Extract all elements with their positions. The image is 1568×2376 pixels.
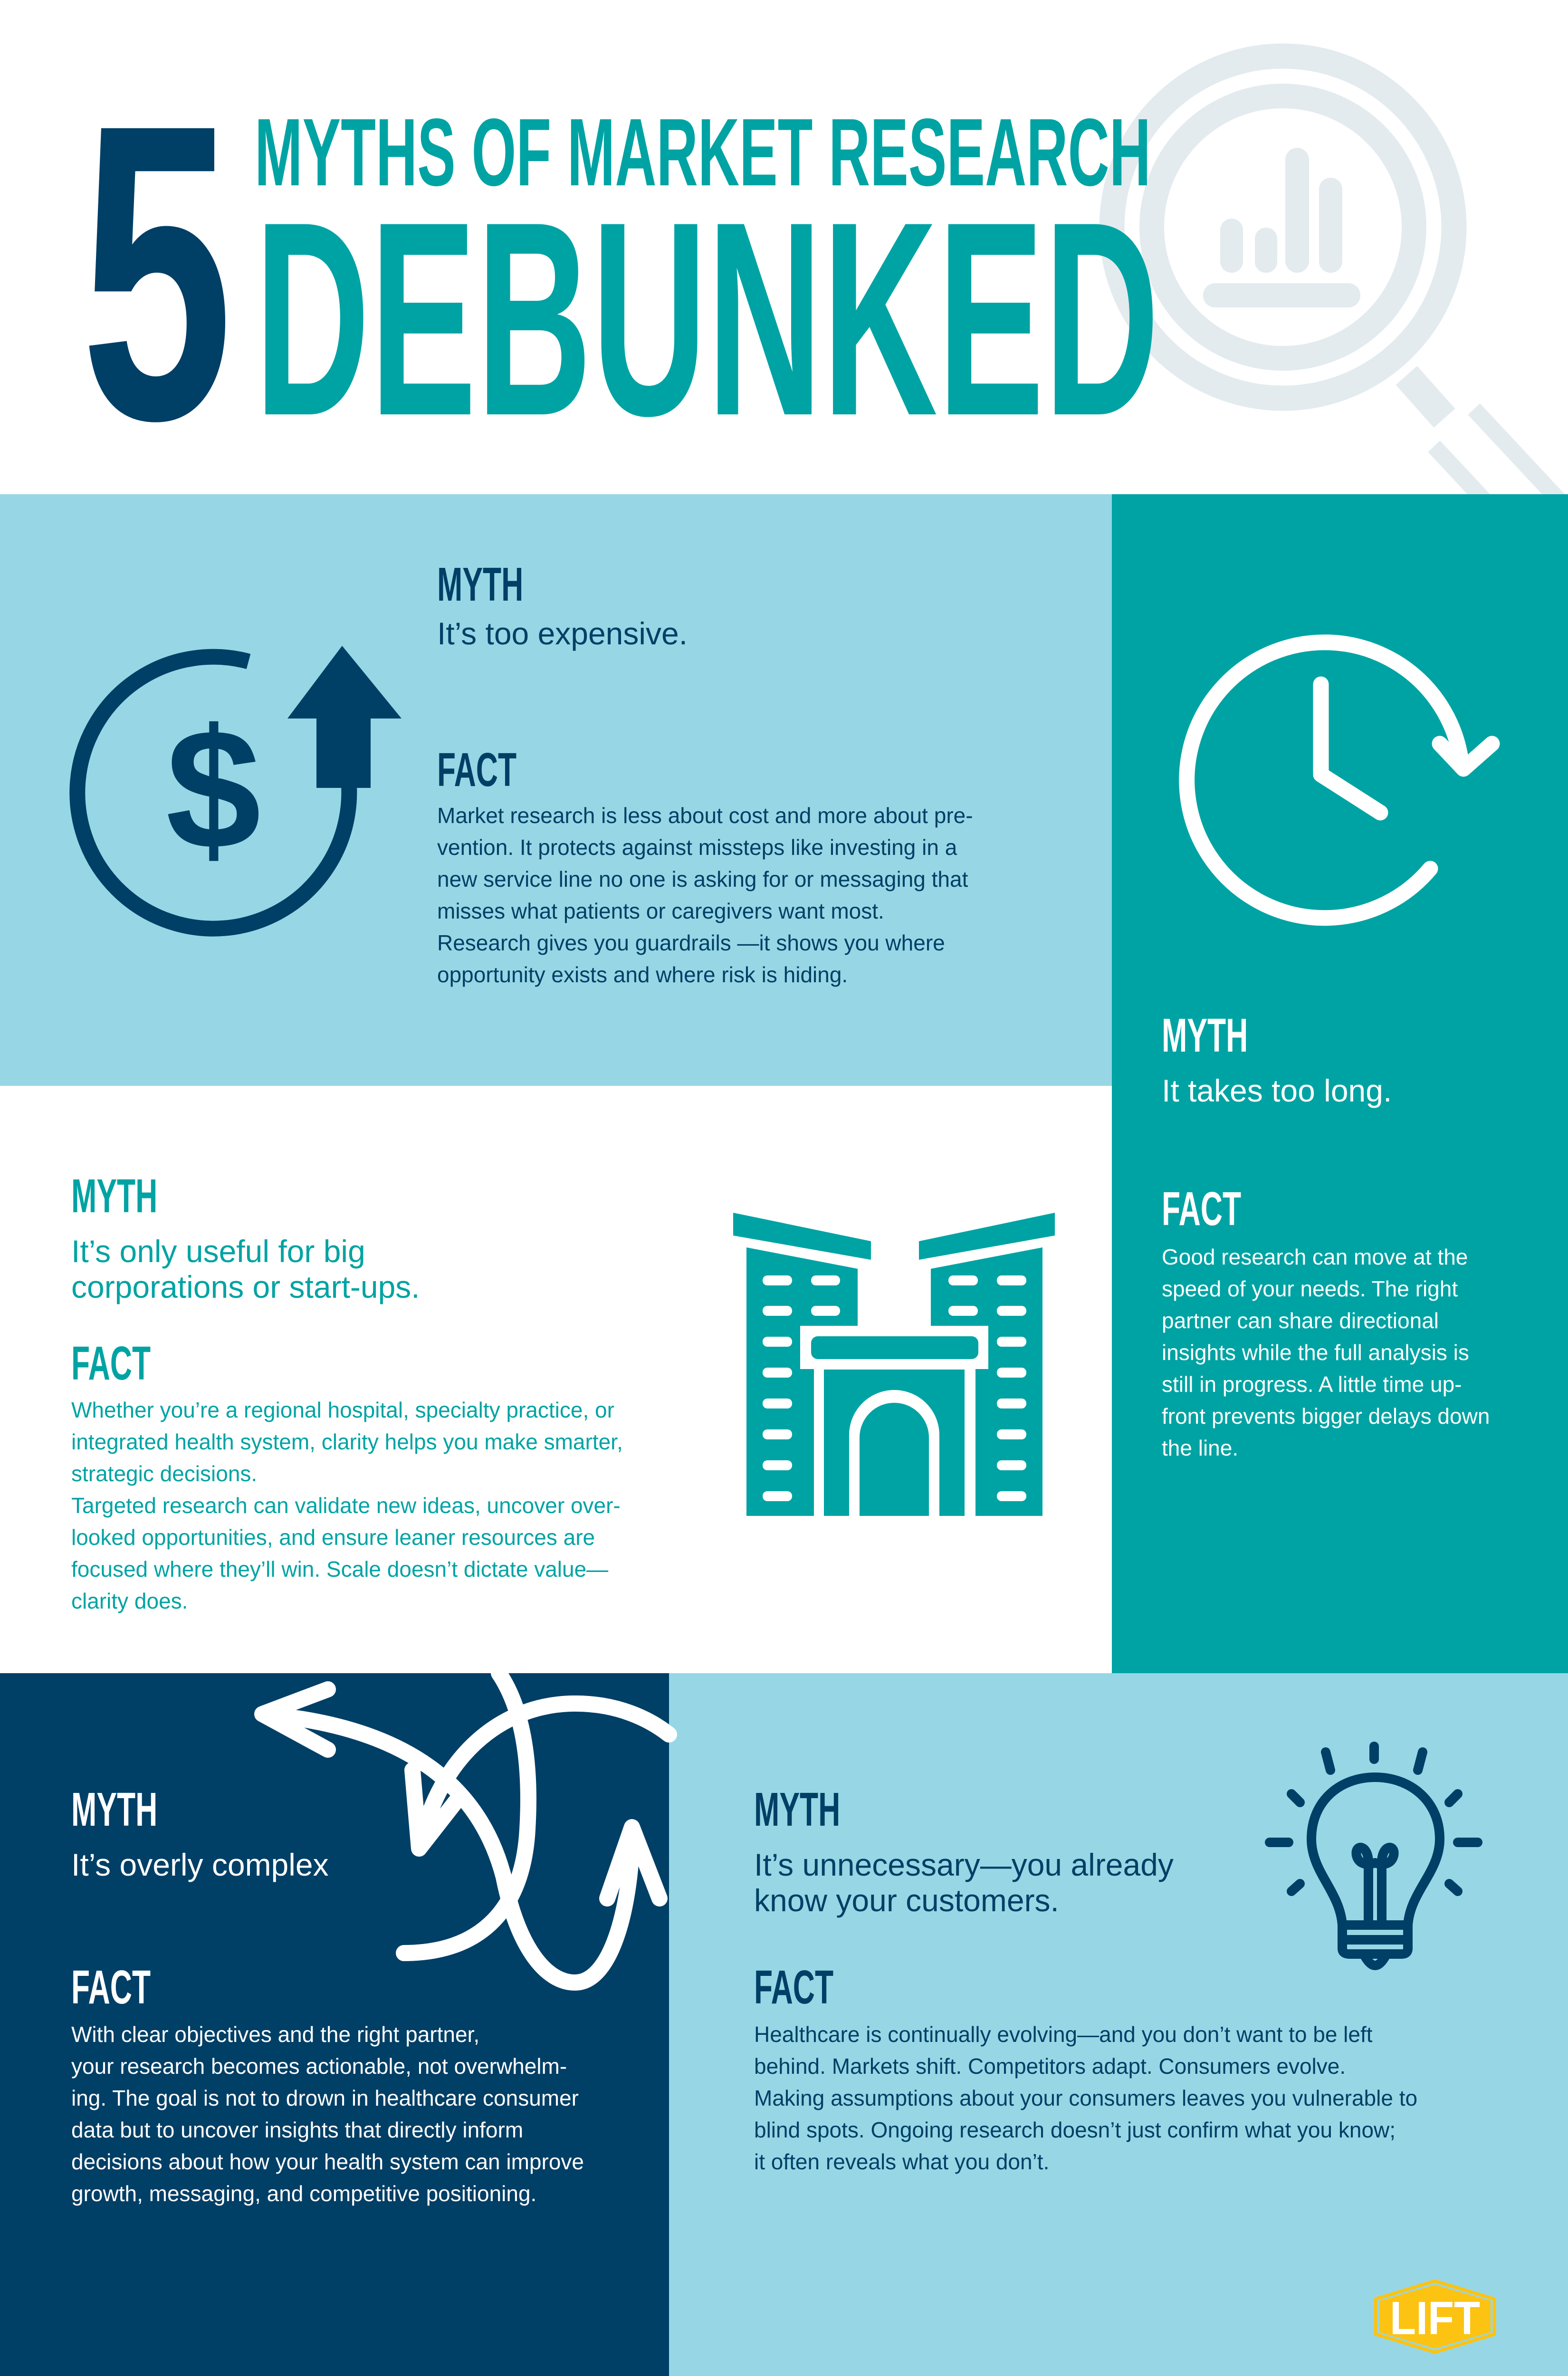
fact text 5: Healthcare is continually evolving—and you don’t want to be left <box>754 2022 1373 2047</box>
panel: too expensive <box>0 494 1112 1086</box>
fact text 3: looked opportunities, and ensure leaner resources are <box>71 1525 595 1550</box>
header <box>0 0 1568 494</box>
heading: fact 4: FACT <box>71 1961 151 2014</box>
fact text 1: opportunity exists and where risk is hiding. <box>437 962 848 987</box>
fact text 4: growth, messaging, and competitive positioning. <box>71 2181 536 2206</box>
fact text 2: partner can share directional <box>1162 1308 1439 1333</box>
icon: clock <box>1187 642 1492 918</box>
fact text 1: vention. It protects against missteps like investing in a <box>437 835 957 860</box>
heading: myth 5: MYTH <box>754 1783 840 1836</box>
panel: big corporations <box>0 1086 1112 1673</box>
heading: fact 3: FACT <box>71 1337 151 1390</box>
myth text 5: It’s unnecessary—you already <box>754 1847 1174 1882</box>
fact text 2: the line. <box>1162 1436 1238 1460</box>
fact text 2: front prevents bigger delays down <box>1162 1404 1490 1428</box>
fact text 4: With clear objectives and the right partner, <box>71 2022 479 2047</box>
heading: myth 4: MYTH <box>71 1783 157 1836</box>
fact text 4 <box>71 2019 584 2210</box>
icon: buildings <box>733 1213 1055 1516</box>
icon: dollar with up arrow: $ <box>166 694 261 885</box>
fact text 3: Whether you’re a regional hospital, specialty practice, or <box>71 1398 614 1422</box>
icon: dollar with up arrow <box>77 646 402 929</box>
myth text 1: It’s too expensive. <box>437 616 688 651</box>
logo: LIFT <box>1376 2281 1494 2352</box>
fact text 2 <box>1162 1241 1490 1464</box>
fact text 3: strategic decisions. <box>71 1461 257 1486</box>
fact text 2: insights while the full analysis is <box>1162 1340 1469 1365</box>
fact text 2: speed of your needs. The right <box>1162 1276 1458 1301</box>
panel: unnecessary <box>669 1673 1568 2376</box>
myth text 3 <box>71 1234 420 1305</box>
title: 5: 5 <box>81 37 233 494</box>
heading: fact 5: FACT <box>754 1961 833 2014</box>
panel: overly complex <box>0 1673 669 2376</box>
fact text 3: clarity does. <box>71 1589 188 1613</box>
heading: myth 1: MYTH <box>437 558 523 611</box>
fact text 5: blind spots. Ongoing research doesn’t just confirm what you know; <box>754 2117 1396 2142</box>
icon: magnifier background <box>1112 56 1568 570</box>
fact text 3: focused where they’ll win. Scale doesn’t dictate value— <box>71 1557 608 1581</box>
fact text 1 <box>437 800 973 991</box>
icon: tangled arrows <box>262 1673 669 1983</box>
heading: myth 2: MYTH <box>1162 1009 1248 1062</box>
fact text 1: Market research is less about cost and more about pre- <box>437 803 973 828</box>
heading: fact 1: FACT <box>437 743 516 796</box>
fact text 3: integrated health system, clarity helps you make smarter, <box>71 1429 623 1454</box>
fact text 5: Making assumptions about your consumers leaves you vulnerable to <box>754 2086 1417 2110</box>
myth text 5 <box>754 1847 1174 1918</box>
heading: myth 3: MYTH <box>71 1169 157 1223</box>
fact text 3: Targeted research can validate new ideas, uncover over- <box>71 1493 621 1518</box>
fact text 4: ing. The goal is not to drown in healthcare consumer <box>71 2086 579 2110</box>
fact text 2: Good research can move at the <box>1162 1245 1468 1269</box>
fact text 5 <box>754 2019 1417 2178</box>
panel: takes too long <box>1112 494 1568 1673</box>
fact text 1: misses what patients or caregivers want most. <box>437 899 884 923</box>
fact text 3 <box>71 1394 623 1617</box>
logo: LIFT: LIFT <box>1390 2292 1480 2344</box>
myth text 2: It takes too long. <box>1162 1073 1392 1108</box>
myth text 4: It’s overly complex <box>71 1847 329 1882</box>
fact text 1: Research gives you guardrails —it shows you where <box>437 930 945 955</box>
fact text 5: behind. Markets shift. Competitors adapt. Consumers evolve. <box>754 2054 1346 2079</box>
myth text 3: corporations or start-ups. <box>71 1269 420 1304</box>
myth text 5: know your customers. <box>754 1883 1059 1918</box>
fact text 5: it often reveals what you don’t. <box>754 2149 1049 2174</box>
fact text 1: new service line no one is asking for or messaging that <box>437 867 968 891</box>
fact text 4: your research becomes actionable, not overwhelm- <box>71 2054 567 2079</box>
myth text 3: It’s only useful for big <box>71 1234 365 1269</box>
fact text 4: data but to uncover insights that directly inform <box>71 2117 523 2142</box>
fact text 4: decisions about how your health system can improve <box>71 2149 584 2174</box>
fact text 2: still in progress. A little time up- <box>1162 1372 1462 1397</box>
icon: lightbulb <box>1270 1746 1478 1965</box>
heading: fact 2: FACT <box>1162 1182 1241 1236</box>
